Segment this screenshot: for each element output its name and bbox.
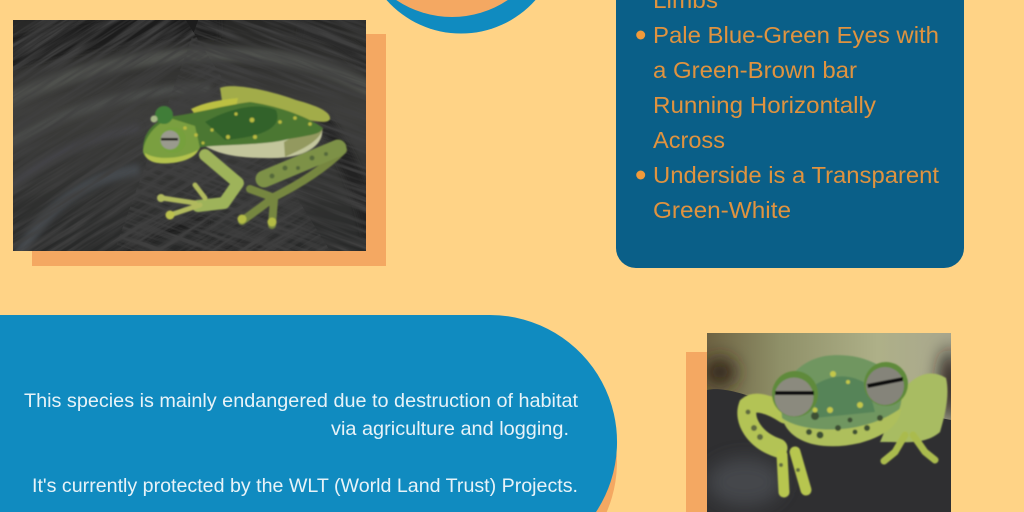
conservation text: It's currently protected by the WLT (World Land Trust) Projects. — [32, 475, 578, 497]
list text: Green-White — [653, 197, 791, 223]
bark streaks — [119, 20, 366, 251]
near thigh — [264, 148, 338, 179]
frog figure — [143, 86, 343, 226]
photo shadow: top left — [32, 34, 386, 266]
thigh mottling — [270, 152, 328, 178]
frog figure — [746, 355, 947, 492]
back spots — [183, 112, 312, 144]
right legs — [880, 373, 947, 442]
photo: glass frog on bark, side view — [13, 20, 366, 251]
eye bump far — [155, 106, 173, 124]
eyes — [772, 371, 818, 417]
panel: conservation status — [0, 315, 617, 512]
panel: appearance description list — [616, 0, 964, 268]
hind foot and shin — [242, 150, 343, 225]
list text: a Green-Brown bar — [653, 57, 857, 83]
head and body — [781, 354, 902, 430]
list text: Across — [653, 127, 725, 153]
list text: Running Horizontally — [653, 92, 876, 118]
panel shadow: conservation — [0, 335, 617, 512]
list text: Underside is a Transparent — [653, 162, 939, 188]
list text: Pale Blue-Green Eyes with — [653, 22, 939, 48]
far hind leg — [220, 86, 330, 122]
conservation text — [24, 390, 579, 497]
skin spots — [806, 412, 883, 438]
photo: glass frog, front view — [704, 333, 960, 512]
conservation text: This species is mainly endangered due to destruction of habitat — [24, 390, 579, 412]
belly — [205, 128, 322, 158]
front leg — [198, 155, 238, 206]
eye — [160, 127, 186, 153]
dark background patches — [704, 349, 960, 421]
photo shadow: bottom right — [686, 352, 726, 512]
log — [707, 389, 951, 512]
bark tone — [13, 20, 366, 251]
conservation text: via agriculture and logging. — [331, 418, 569, 440]
leg spots — [746, 410, 800, 472]
list text — [636, 0, 939, 223]
decorative circle cropped at top — [386, 0, 536, 34]
left front leg — [747, 403, 785, 448]
body — [142, 102, 323, 149]
